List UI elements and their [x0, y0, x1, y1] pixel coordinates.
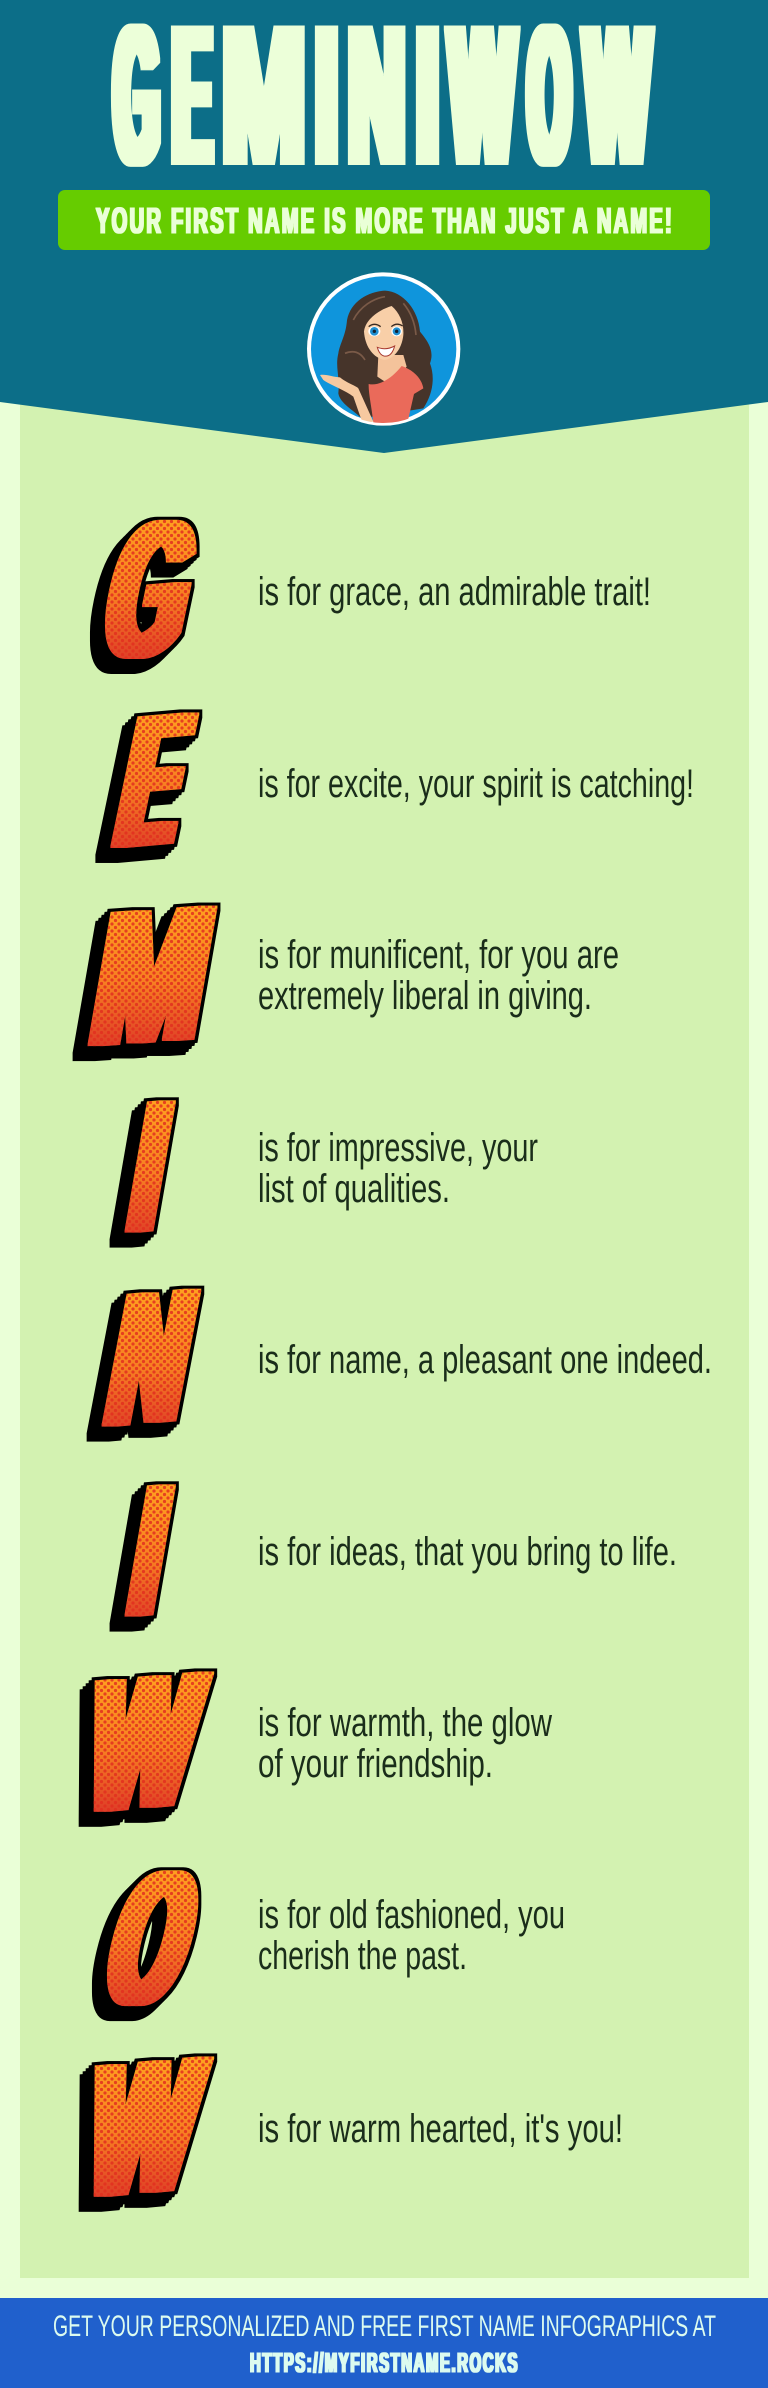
text: old fashioned: [258, 1893, 565, 1978]
letter W: W: [76, 1632, 213, 1854]
letter E: [95, 709, 202, 863]
letter O: [92, 1867, 202, 2022]
text: impressive: is for impressive, your: [258, 1126, 538, 1170]
subtitle banner: [58, 190, 710, 250]
footer band: [0, 2298, 768, 2388]
letter G: [90, 516, 200, 674]
text: impressive: list of qualities.: [258, 1167, 450, 1211]
letter O: O: [90, 1829, 215, 2049]
letter I: I: [119, 1444, 181, 1656]
title: [115, 0, 650, 205]
letter W: W: [76, 2017, 213, 2239]
header band: [0, 0, 768, 453]
line: warm hearted: is for warm hearted, it's you!: [258, 2107, 623, 2151]
letter I: [110, 1481, 179, 1632]
text: munificent: extremely liberal in giving.: [258, 974, 592, 1018]
letter N: N: [95, 1247, 208, 1467]
text: munificent: is for munificent, for you are: [258, 933, 619, 977]
letter E: E: [104, 672, 205, 888]
letter M: [72, 902, 220, 1062]
letter W: [78, 1668, 218, 1827]
icon: avatar of woman in circle: [307, 272, 460, 426]
letter I: I: [119, 1060, 181, 1272]
letter N: [86, 1286, 204, 1442]
letter W: [78, 2053, 218, 2212]
letter M: M: [80, 866, 225, 1088]
letter G: G: [90, 479, 211, 701]
text: old fashioned: cherish the past.: [258, 1934, 467, 1978]
text: impressive: [258, 1126, 538, 1211]
panel: acrostic body: [20, 380, 749, 2278]
text: warmth: of your friendship.: [258, 1742, 493, 1786]
text: warmth: [258, 1701, 552, 1786]
letter I: [110, 1097, 179, 1248]
text: warmth: is for warmth, the glow: [258, 1701, 552, 1745]
text: munificent: [258, 933, 619, 1018]
footer url: HTTPS://MYFIRSTNAME.ROCKS: [250, 2347, 519, 2378]
text: old fashioned: is for old fashioned, you: [258, 1893, 565, 1937]
